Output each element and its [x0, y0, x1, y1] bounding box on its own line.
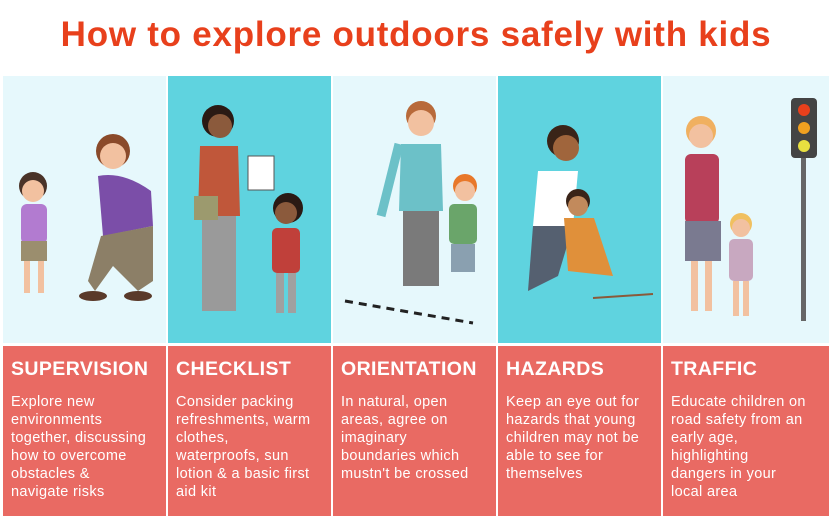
panel: traffic	[663, 76, 829, 516]
text: hazards	[498, 346, 661, 516]
text: supervision: environments	[11, 412, 102, 428]
text: supervision: together, discussing	[11, 430, 146, 446]
text: traffic: local area	[671, 484, 737, 500]
text: hazards: HAZARDS	[506, 358, 604, 380]
panel: orientation	[333, 76, 496, 516]
text: checklist: aid kit	[176, 484, 216, 500]
text: supervision: navigate risks	[11, 484, 105, 500]
text: hazards: themselves	[506, 466, 583, 482]
text: hazards: children may not be	[506, 430, 639, 446]
illustration: orientation	[333, 76, 496, 343]
text: checklist: Consider packing	[176, 394, 294, 410]
text: checklist: waterproofs, sun	[176, 448, 289, 464]
text: checklist: lotion & a basic first	[176, 466, 309, 482]
text: traffic: highlighting	[671, 448, 749, 464]
text: supervision: how to overcome	[11, 448, 127, 464]
text: checklist	[168, 346, 331, 516]
text: traffic: early age,	[671, 430, 738, 446]
text: orientation: mustn't be crossed	[341, 466, 469, 482]
text: traffic: Educate children on	[671, 394, 806, 410]
text: traffic	[663, 346, 829, 516]
text: hazards: Keep an eye out for	[506, 394, 639, 410]
text: checklist: CHECKLIST	[176, 358, 291, 380]
panel: hazards	[498, 76, 661, 516]
text: supervision: Explore new	[11, 394, 95, 410]
panel: checklist	[168, 76, 331, 516]
text: traffic: dangers in your	[671, 466, 776, 482]
title: How to explore outdoors safely with kids	[61, 15, 771, 54]
text: traffic: TRAFFIC	[671, 358, 757, 380]
illustration: hazards	[498, 76, 661, 343]
text: orientation	[333, 346, 496, 516]
text: orientation: boundaries which	[341, 448, 459, 464]
illustration: supervision	[3, 76, 166, 343]
text: supervision	[3, 346, 166, 516]
text: orientation: ORIENTATION	[341, 358, 477, 380]
panel: supervision	[3, 76, 166, 516]
illustration: checklist	[168, 76, 331, 343]
text: hazards: hazards that young	[506, 412, 636, 428]
text: checklist: clothes,	[176, 430, 229, 446]
text: supervision: obstacles &	[11, 466, 90, 482]
text: orientation: areas, agree on	[341, 412, 448, 428]
text: traffic: road safety from an	[671, 412, 803, 428]
text: checklist: refreshments, warm	[176, 412, 310, 428]
illustration: traffic	[663, 76, 829, 343]
text: supervision: SUPERVISION	[11, 358, 148, 380]
text: orientation: In natural, open	[341, 394, 447, 410]
text: hazards: able to see for	[506, 448, 603, 464]
text: orientation: imaginary	[341, 430, 407, 446]
